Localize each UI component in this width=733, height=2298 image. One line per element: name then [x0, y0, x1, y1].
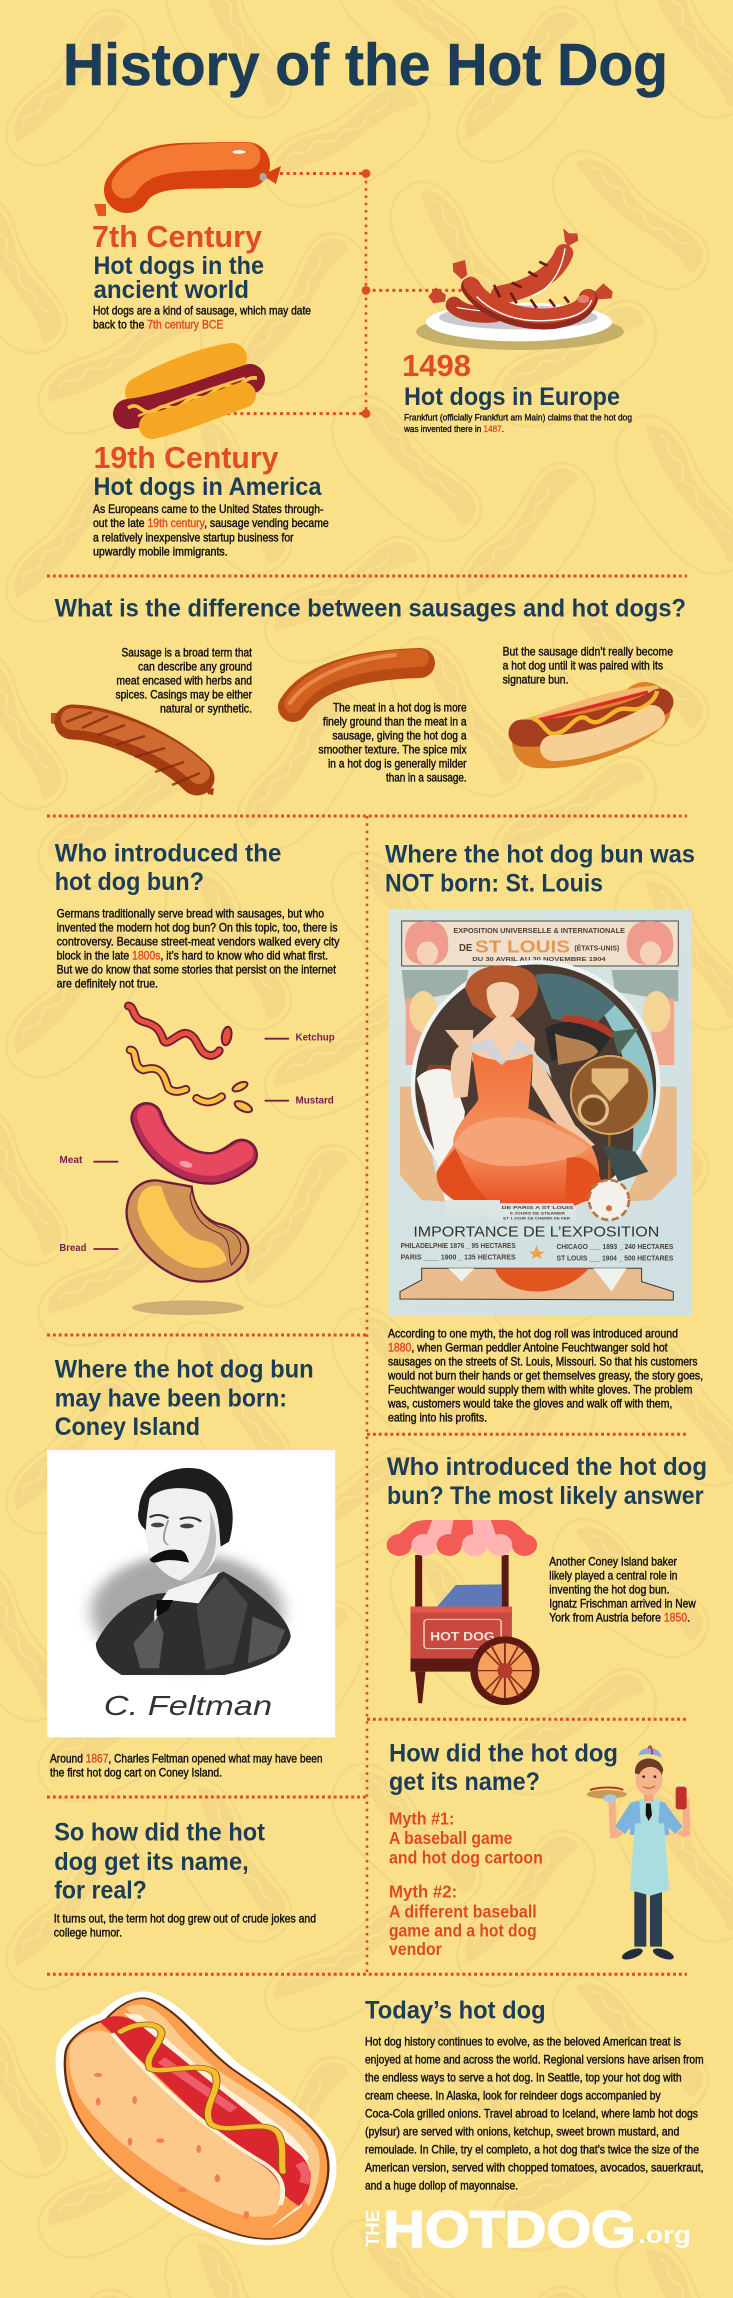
poster lower text: CHICAGO ___ 1893 _ 240 HECTARES	[557, 1244, 674, 1251]
text: hot dog meat	[318, 701, 467, 785]
text: hot dog meat: than in a sausage.	[386, 771, 467, 785]
block: 7th century	[92, 219, 311, 332]
text: today's hot dog: Hot dog history continues to evolve, as the beloved American treat is	[365, 2034, 681, 2048]
mustard	[121, 2024, 283, 2172]
poster caption: 6 JOURS DE STEAMER	[510, 1211, 566, 1215]
heading: how did it get its name: get its name?	[389, 1768, 540, 1796]
icon: hot dog cart	[387, 1520, 539, 1705]
myths list: A baseball game	[389, 1828, 513, 1848]
text: sausage definition: natural or synthetic.	[160, 701, 252, 715]
timeline connector	[210, 169, 475, 418]
text: signature bun	[503, 645, 673, 687]
text: Ignatz Frischman	[549, 1555, 696, 1625]
myths list: game and a hot dog	[389, 1921, 537, 1941]
logo: The Hot Dog .org: HOTDOG	[383, 2201, 636, 2259]
text: today's hot dog: cream cheese. In Alaska, look for reindeer dogs accompanied by	[365, 2088, 661, 2102]
cart body	[410, 1607, 512, 1703]
title: History of the Hot Dog	[63, 32, 668, 98]
block: 1498: Frankfurt (officially Frankfurt am Main) claims that the hot dog	[404, 412, 632, 423]
text: today's hot dog	[365, 2034, 704, 2192]
logo: The Hot Dog .org: THE	[363, 2210, 383, 2247]
text: bun controversy: controversy. Because street-meat vendors walked every city	[57, 934, 339, 948]
text: Feuchtwanger myth: was, customers would take the gloves and walk off with them,	[387, 1397, 672, 1411]
block: 19th century: out the late 19th century, sausage vending became	[93, 516, 329, 530]
text: bun controversy	[57, 906, 339, 990]
text: hot dog meat: finely ground than the meat in a	[323, 715, 467, 729]
text: sausage definition: can describe any ground	[138, 660, 252, 674]
poster header: DU 30 AVRIL AU 30 NOVEMBRE 1904	[472, 957, 606, 963]
text: sausage definition: Sausage is a broad term that	[122, 646, 253, 660]
icon: hot dog vendor	[587, 1746, 691, 1962]
block: 1498: 1498	[402, 348, 471, 383]
caption: Feltman: the first hot dog cart on Coney Island.	[50, 1766, 222, 1780]
bread	[127, 1180, 248, 1282]
caption: Feltman: Around 1867, Charles Feltman opened what may have been	[50, 1752, 323, 1766]
block: 19th century: 19th Century	[94, 440, 279, 475]
block: 19th century: upwardly mobile immigrants.	[93, 544, 228, 558]
text: Feuchtwanger myth: Feuchtwanger would supply them with white gloves. The problem	[388, 1383, 693, 1397]
heading: not born St. Louis: NOT born: St. Louis	[385, 870, 603, 898]
poster medallion	[413, 962, 658, 1208]
block: 7th century: Hot dogs are a kind of sausage, which may date	[93, 304, 311, 318]
heading: how for real: dog get its name,	[54, 1848, 249, 1876]
poster lower text: PHILADELPHIE 1876 _ 95 HECTARES	[401, 1243, 516, 1250]
poster lower text: ST LOUIS ___ 1904 _ 500 HECTARES	[557, 1255, 674, 1262]
text: hot dog meat: in a hot dog is generally milder	[328, 757, 467, 771]
poster header: (ÉTATS-UNIS)	[574, 943, 620, 952]
text: crude jokes	[54, 1912, 316, 1940]
text: today's hot dog: Coca-Cola grilled onions. Travel abroad to Iceland, where lamb hot dogs	[365, 2106, 698, 2120]
block: 19th century: Hot dogs in America	[94, 473, 323, 501]
myths list: Myth #2:	[389, 1881, 457, 1901]
poster header: DE	[459, 943, 473, 954]
caption: Feltman	[50, 1752, 323, 1780]
text: signature bun: a hot dog until it was paired with its	[503, 659, 663, 673]
meat	[147, 1116, 243, 1169]
block: 7th century: 7th Century	[92, 219, 263, 254]
text: Feuchtwanger myth: According to one myth, the hot dog roll was introduced around	[388, 1327, 678, 1341]
icon: sausages on plate	[416, 228, 624, 350]
labels: Ketchup	[296, 1032, 335, 1044]
block: 7th century: ancient world	[94, 276, 249, 304]
text: crude jokes: college humor.	[54, 1926, 122, 1940]
labels: Bread	[59, 1242, 86, 1254]
text: bun controversy: But we do know that some stories that persist on the internet	[57, 962, 337, 976]
heading: how for real	[54, 1819, 266, 1904]
text: Feuchtwanger myth	[387, 1327, 703, 1425]
logo: The Hot Dog .org: .org	[638, 2222, 691, 2249]
poster lower text: IMPORTANCE DE L’EXPOSITION	[413, 1225, 659, 1241]
heading: Coney Island: Coney Island	[55, 1413, 200, 1441]
poster header: ST LOUIS	[475, 936, 570, 956]
text: Ignatz Frischman: likely played a central role in	[549, 1569, 677, 1583]
icon: hot dog with mustard	[128, 358, 257, 426]
poster base	[400, 1268, 673, 1300]
block: 1498	[402, 348, 632, 435]
text: today's hot dog: and a huge dollop of mayonnaise.	[365, 2178, 518, 2192]
text: Ignatz Frischman: Another Coney Island baker	[549, 1555, 677, 1569]
text: hot dog meat: smoother texture. The spice mix	[318, 743, 467, 757]
poster caption	[445, 1180, 629, 1220]
text: Feuchtwanger myth: 1880, when German peddler Antoine Feuchtwanger sold hot	[388, 1341, 668, 1355]
text: bun controversy: are definitely not true.	[57, 976, 158, 990]
heading: not born St. Louis	[385, 840, 695, 898]
text: sausage definition: spices. Casings may be either	[116, 688, 252, 702]
text: bun controversy: Germans traditionally serve bread with sausages, but who	[57, 906, 324, 920]
block: 19th century: a relatively inexpensive startup business for	[93, 530, 294, 544]
text: bun controversy: invented the modern hot dog bun? On this topic, too, there is	[57, 920, 338, 934]
heading: difference between sausages and hot dogs: What is the difference between sausages and hot dogs?	[55, 595, 686, 623]
portrait: Charles Feltman	[47, 1450, 335, 1737]
mustard squiggle	[130, 1050, 254, 1115]
heading: most likely answer: bun? The most likely answer	[387, 1482, 704, 1510]
text: Feuchtwanger myth: eating into his profits.	[388, 1411, 487, 1425]
canopy	[387, 1520, 537, 1556]
myths list: and hot dog cartoon	[389, 1847, 543, 1867]
poster lower text	[401, 1225, 674, 1262]
text: bun controversy: block in the late 1800s, it’s hard to know who did what first.	[57, 948, 328, 962]
heading: Coney Island: Where the hot dog bun	[55, 1355, 314, 1383]
labels: Meat	[59, 1154, 83, 1166]
heading: most likely answer: Who introduced the hot dog	[387, 1453, 707, 1481]
heading: most likely answer	[387, 1453, 707, 1510]
block: 7th century: Hot dogs in the	[94, 252, 264, 280]
logo: The Hot Dog .org	[363, 2201, 691, 2259]
diagram: hot dog parts	[59, 1006, 335, 1315]
icon: plain sausage	[290, 655, 420, 707]
myths list: Myth #1:	[389, 1809, 454, 1829]
icon: hot dog in bun	[522, 690, 660, 748]
heading: how did it get its name	[389, 1740, 618, 1796]
poster globe	[571, 1056, 649, 1134]
block: 7th century: back to the 7th century BCE	[93, 318, 224, 332]
heading: Coney Island: may have been born:	[55, 1385, 287, 1413]
poster woman	[437, 965, 601, 1207]
text: signature bun: signature bun.	[503, 673, 568, 687]
text: today's hot dog: the endless ways to serve a hot dog. In Seattle, top your hot dog with	[365, 2070, 682, 2084]
text: today's hot dog: (pylsur) are served with onions, ketchup, sweet brown mustard, and	[365, 2124, 679, 2138]
myths list	[389, 1809, 543, 1959]
text: Ignatz Frischman: inventing the hot dog bun.	[549, 1583, 670, 1597]
poster image	[388, 909, 692, 1316]
myths list: vendor	[389, 1939, 442, 1959]
seeds	[94, 2073, 249, 2219]
heading: Coney Island	[55, 1355, 314, 1441]
poster side panels	[402, 970, 678, 1002]
text: crude jokes: It turns out, the term hot dog grew out of crude jokes and	[54, 1912, 316, 1926]
heading: who introduced the bun: Who introduced the	[55, 840, 281, 868]
heading: who introduced the bun: hot dog bun?	[55, 868, 204, 896]
block: 19th century: As Europeans came to the United States through-	[93, 502, 324, 516]
labels	[59, 1032, 335, 1254]
block: 1498: Hot dogs in Europe	[404, 383, 620, 411]
poster header	[402, 921, 678, 966]
heading: not born St. Louis: Where the hot dog bun was	[385, 840, 695, 868]
text: sausage definition	[116, 646, 253, 715]
heading: how for real: for real?	[54, 1876, 147, 1904]
myths list: A different baseball	[389, 1901, 537, 1921]
block: 19th century	[93, 440, 329, 558]
cart body: HOT DOG	[430, 1631, 495, 1644]
heading: how did it get its name: How did the hot dog	[389, 1740, 618, 1768]
poster header: EXPOSITION UNIVERSELLE & INTERNATIONALE	[453, 926, 625, 935]
heading: who introduced the bun	[55, 840, 281, 896]
labels: Mustard	[296, 1094, 334, 1106]
text: Ignatz Frischman: Ignatz Frischman arrived in New	[549, 1597, 696, 1611]
heading: how for real: So how did the hot	[54, 1819, 266, 1847]
signature: C. Feltman	[104, 1691, 272, 1722]
ketchup squiggle	[128, 1006, 233, 1056]
icon: orange sausage	[94, 150, 281, 216]
text: signature bun: But the sausage didn’t really become	[503, 645, 673, 659]
text: hot dog meat: The meat in a hot dog is more	[333, 701, 467, 715]
text: sausage definition: meat encased with herbs and	[116, 674, 252, 688]
icon: grilled sausage	[51, 712, 214, 795]
text: Ignatz Frischman: York from Austria before 1850.	[549, 1611, 690, 1625]
poster caption: DE PARIS A ST LOUIS	[502, 1205, 574, 1211]
poster lower text: PARIS ____ 1900 _ 135 HECTARES	[401, 1254, 516, 1261]
text: hot dog meat: sausage, giving the hot dog a	[332, 729, 467, 743]
heading: today's hot dog: Today’s hot dog	[365, 1996, 546, 2024]
illustration: large hot dog sticker	[56, 1992, 337, 2245]
block: 1498: was invented there in 1487.	[403, 424, 504, 435]
shadow	[132, 1300, 244, 1315]
wheel	[470, 1636, 539, 1705]
poster caption: ET 1 JOUR DE CHEMIN DE FER	[503, 1216, 571, 1220]
